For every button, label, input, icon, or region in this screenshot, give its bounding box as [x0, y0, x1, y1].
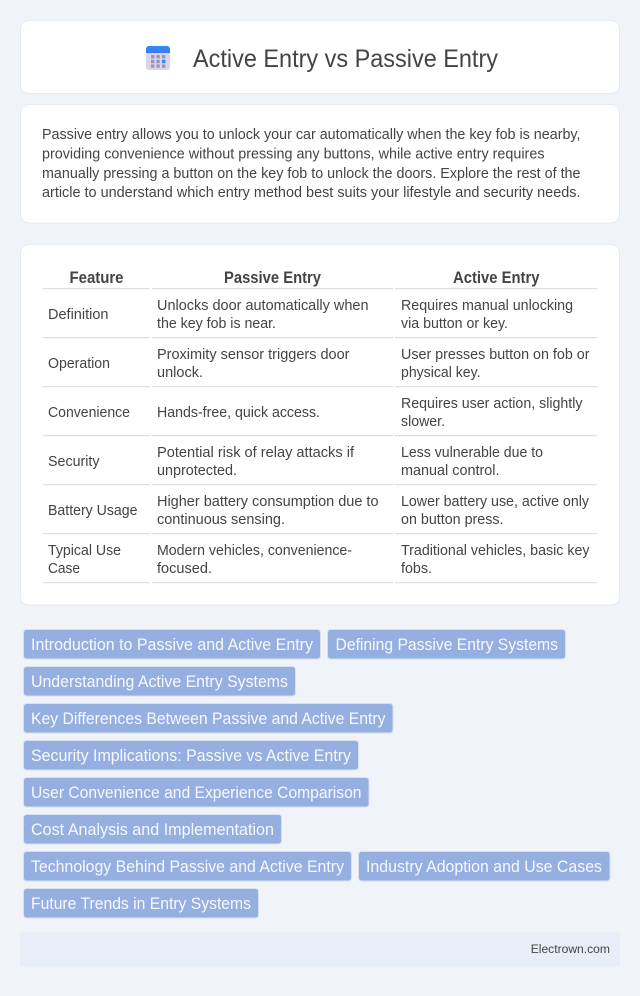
table row: security: unprotected. — [157, 463, 237, 479]
tag: future trends — [24, 888, 258, 918]
tag: industry — [358, 852, 610, 881]
tag: introduction: Introduction to Passive and Active Entry — [31, 636, 314, 654]
topic tags — [24, 630, 610, 918]
table header row: Passive Entry — [224, 269, 322, 287]
table row: security — [43, 445, 597, 485]
tag: industry: Industry Adoption and Use Cases — [366, 858, 602, 876]
table row: definition: the key fob is near. — [157, 316, 276, 332]
tag: key differences — [24, 704, 393, 733]
table row: operation: User presses button on fob or — [401, 347, 590, 363]
table header row: Feature — [70, 269, 124, 287]
table row: convenience: slower. — [401, 414, 445, 430]
tag: introduction — [24, 630, 320, 659]
table row: battery usage: continuous sensing. — [157, 512, 285, 528]
tag: cost — [24, 814, 282, 844]
tag: security — [24, 740, 358, 770]
tag: understanding: Understanding Active Entry Systems — [31, 673, 288, 691]
text block: introduction: providing convenience without pressing any buttons, while active entry requires — [42, 146, 544, 162]
panel: header — [20, 20, 620, 94]
table row: security: manual control. — [401, 463, 500, 479]
tag: future trends: Future Trends in Entry Systems — [31, 895, 251, 913]
tag: defining — [328, 630, 566, 659]
text block: introduction: manually pressing a button on the key fob to unlock the doors. Explore the rest of the — [42, 166, 580, 182]
table row: security: Potential risk of relay attacks if — [157, 445, 355, 461]
table row: convenience: Hands-free, quick access. — [157, 405, 320, 421]
tag: user convenience — [24, 778, 369, 807]
table row: convenience — [43, 396, 597, 436]
table row: battery usage — [43, 494, 597, 534]
table row: operation: Operation — [48, 356, 110, 372]
tag: defining: Defining Passive Entry Systems — [336, 636, 558, 654]
tag: technology: Technology Behind Passive and Active Entry — [31, 858, 345, 876]
table row: battery usage: on button press. — [401, 512, 504, 528]
table row: typical use case: fobs. — [401, 561, 432, 577]
table row: battery usage: Higher battery consumption due to — [157, 494, 378, 510]
table row: operation: physical key. — [401, 365, 480, 381]
table row: typical use case: Modern vehicles, convenience- — [157, 543, 352, 559]
panel: introduction — [20, 104, 620, 223]
panel: comparison table — [20, 244, 620, 605]
table row: definition: Unlocks door automatically when — [157, 298, 368, 314]
tag: cost: Cost Analysis and Implementation — [31, 821, 274, 839]
table row: battery usage: Battery Usage — [48, 503, 138, 519]
footer — [20, 932, 620, 966]
table row: definition: Requires manual unlocking — [401, 298, 573, 314]
table row: typical use case: Typical Use — [48, 543, 121, 559]
table row: convenience: Convenience — [48, 405, 130, 421]
table row: convenience: Requires user action, slightly — [401, 396, 583, 412]
table row: operation — [43, 347, 597, 387]
table row: typical use case: Case — [48, 561, 80, 577]
table row: security: Security — [48, 454, 100, 470]
table row: security: Less vulnerable due to — [401, 445, 543, 461]
footer: Electrown.com — [531, 942, 610, 956]
tag: understanding — [24, 666, 296, 696]
table header row — [43, 269, 597, 289]
table row: operation: Proximity sensor triggers door — [157, 347, 350, 363]
table row: operation: unlock. — [157, 365, 203, 381]
table row: battery usage: Lower battery use, active only — [401, 494, 590, 510]
table header row: Active Entry — [453, 269, 540, 287]
table row: definition: via button or key. — [401, 316, 508, 332]
tag: user convenience: User Convenience and Experience Comparison — [31, 784, 362, 802]
title: Active Entry vs Passive Entry — [193, 45, 498, 73]
text block: introduction — [42, 127, 580, 201]
text block: introduction: article to understand which entry method best suits your lifestyle and security needs. — [42, 185, 580, 201]
table row: typical use case — [43, 543, 597, 583]
table row: typical use case: focused. — [157, 561, 212, 577]
table row: typical use case: Traditional vehicles, basic key — [401, 543, 590, 559]
table row: definition — [43, 298, 597, 338]
table row: definition: Definition — [48, 307, 108, 323]
icon: calendar — [146, 46, 170, 70]
tag: key differences: Key Differences Between Passive and Active Entry — [31, 710, 386, 728]
tag: security: Security Implications: Passive vs Active Entry — [31, 747, 352, 765]
tag: technology — [24, 852, 352, 881]
text block: introduction: Passive entry allows you to unlock your car automatically when the key fob is nearby, — [42, 127, 580, 143]
